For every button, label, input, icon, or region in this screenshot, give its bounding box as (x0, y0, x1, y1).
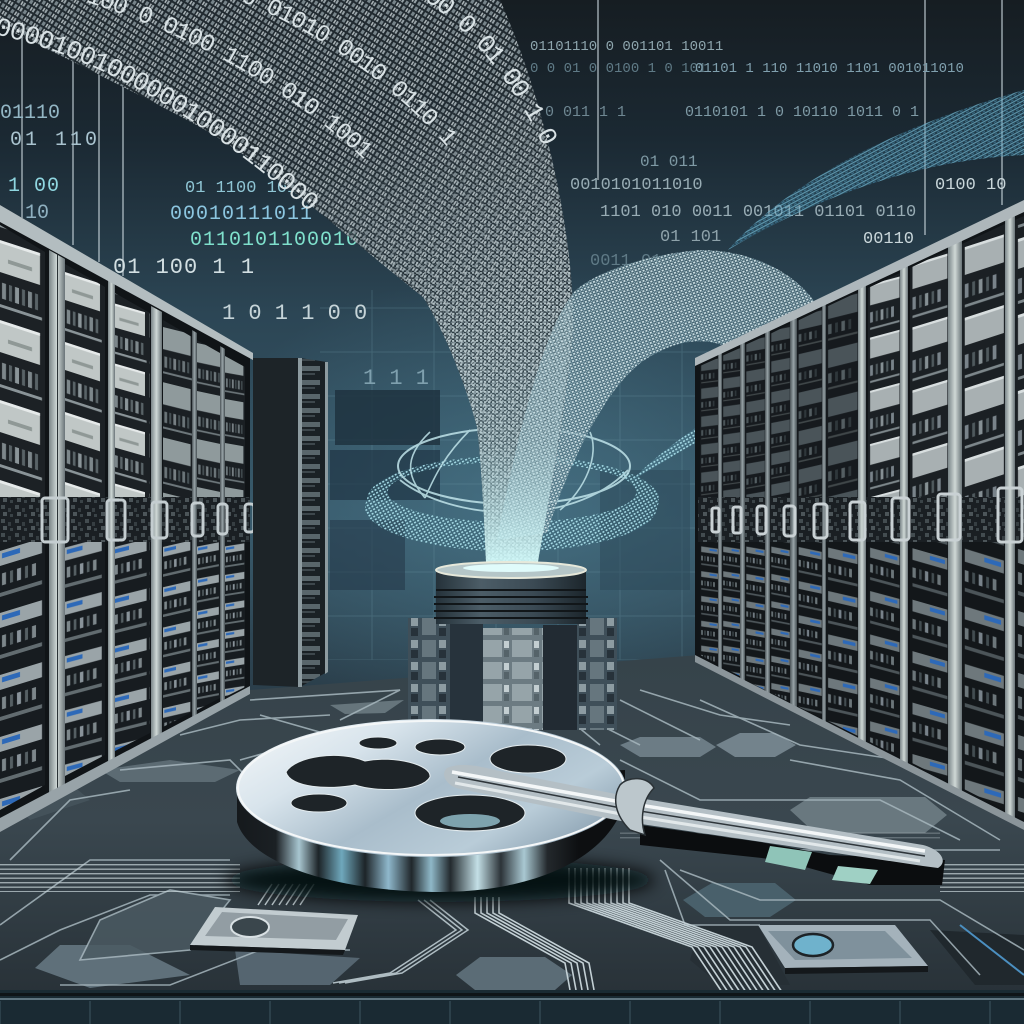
right rack handles (712, 488, 1022, 542)
key disc face (236, 719, 626, 857)
binary digits background: 01 110 (10, 129, 100, 152)
binary digits background: 0011 01 (590, 252, 661, 271)
key (225, 719, 945, 902)
black cabinet (253, 358, 328, 687)
binary digits background (0, 39, 1006, 391)
data stream funnel (0, 0, 573, 562)
binary digits background: 01110 (0, 102, 60, 125)
right rack lower units (700, 540, 1024, 820)
background wall (0, 0, 1024, 730)
binary digits background: 01 1100 101 (185, 179, 297, 198)
server racks right (695, 200, 1024, 830)
left rack posts (0, 205, 253, 832)
left rack lower units (0, 540, 245, 810)
binary digits background: 0110101100010 (190, 229, 359, 252)
key disc rim (237, 770, 625, 892)
binary digits background: 1 1 1 (363, 366, 429, 391)
key disc holes (286, 737, 566, 831)
orbit rings (365, 428, 659, 551)
funnel glow (423, 297, 573, 562)
binary digits background: 01 100 1 1 (113, 255, 255, 280)
central storage cylinder (408, 562, 617, 730)
data arch loop (497, 250, 828, 540)
floor chip left (190, 907, 358, 955)
binary ribbon on the funnel: 0000100100000010000110000 (0, 18, 318, 209)
floor (0, 655, 1024, 1024)
left rack handle band (0, 497, 250, 542)
binary digits background: 00010111011 (170, 203, 313, 226)
binary digits background: 01 101 (660, 228, 721, 247)
storage base units (408, 618, 617, 730)
floor chip right (758, 925, 928, 974)
key collar (616, 779, 654, 835)
binary digits background: 0010101011010 (570, 176, 703, 195)
server racks left (0, 205, 254, 832)
binary digits background: 1101 010 0011 001011 01101 0110 (600, 203, 916, 222)
left rack handles (42, 498, 254, 542)
binary digits background: 0 011 1 1 (545, 104, 626, 121)
binary digits background: 01101 1 110 11010 1101 001011010 (695, 61, 964, 77)
binary digits background: 10 (25, 202, 49, 225)
circuit traces (0, 690, 1024, 985)
right rack upper units (700, 216, 1024, 497)
key shadow (225, 858, 655, 902)
trace bundles (258, 868, 782, 992)
right rack posts (695, 200, 1024, 830)
binary digits background: 0110101 1 0 10110 1011 0 1 (685, 104, 919, 121)
binary digits background: 0 0 01 0 0100 1 0 101 (530, 61, 706, 77)
binary digits background: 1 0 1 1 0 0 (222, 301, 367, 326)
floor base bar (0, 990, 1024, 1024)
vertical data lines (22, 0, 1002, 276)
lower data ribbon (630, 335, 827, 482)
binary digits background: 01101110 0 001101 10011 (530, 39, 723, 55)
binary digits background: 0100 10 (935, 176, 1006, 195)
binary digits background: 1 00 (8, 175, 60, 198)
floor panels (0, 700, 1024, 990)
left rack upper units (0, 225, 245, 497)
upper right data ribbon (728, 90, 1024, 250)
key underside and teeth (640, 825, 945, 885)
right rack handle band (698, 497, 1024, 542)
binary digits background: 00110 (863, 230, 914, 249)
key shaft (444, 765, 943, 868)
binary digits background: 01 011 (640, 153, 698, 171)
